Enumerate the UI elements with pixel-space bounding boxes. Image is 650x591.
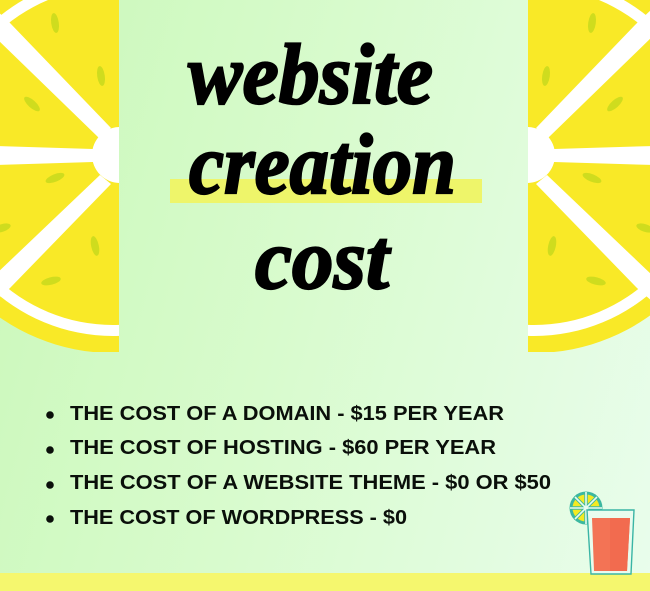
title: creation	[189, 116, 456, 212]
list item: theme: THE COST OF A WEBSITE THEME - $0 OR $50	[70, 471, 551, 494]
list item: wordpress: THE COST OF WORDPRESS - $0	[70, 506, 407, 529]
title highlight bar	[170, 179, 482, 203]
cost list	[46, 402, 551, 529]
list item: hosting: THE COST OF HOSTING - $60 PER YEAR	[70, 436, 496, 459]
title: cost	[255, 211, 392, 307]
icon: right lemon slice	[528, 0, 650, 352]
title: website	[188, 26, 433, 122]
title	[188, 26, 456, 307]
icon: left lemon slice	[0, 0, 119, 352]
footer band	[0, 573, 650, 591]
icon: drink with lemon	[570, 492, 634, 574]
list item: domain: THE COST OF A DOMAIN - $15 PER YEAR	[70, 402, 504, 425]
